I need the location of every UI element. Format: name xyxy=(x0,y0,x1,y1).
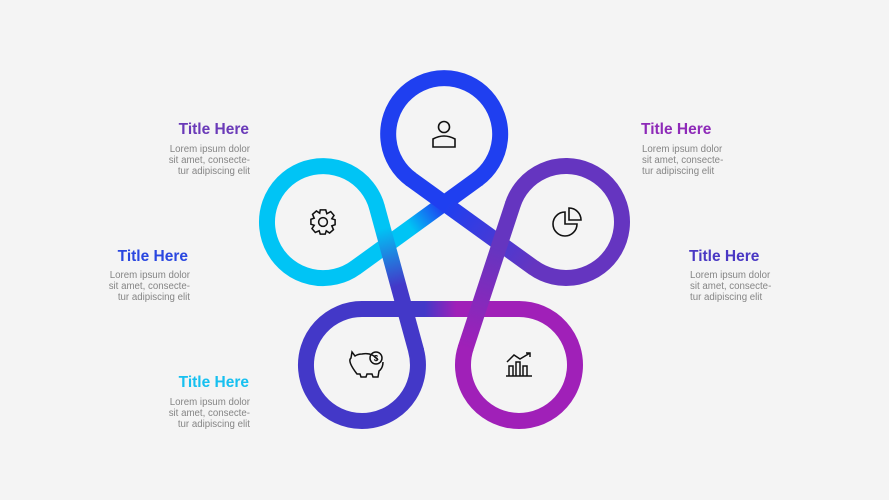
band: right to magenta xyxy=(466,204,513,348)
text block: top-left: sit amet, consecte- xyxy=(169,155,250,166)
text block: bottom-left xyxy=(169,374,251,430)
text block: top-right: sit amet, consecte- xyxy=(642,155,723,166)
text block: top-left xyxy=(169,121,251,177)
icon: gear xyxy=(311,210,335,234)
text block: middle-left xyxy=(109,248,191,303)
text block: bottom-left: Title Here xyxy=(179,374,249,391)
band: indigo to cyan xyxy=(377,206,416,351)
text block: top-right: tur adipiscing elit xyxy=(642,166,714,177)
text block: top-left: Lorem ipsum dolor xyxy=(170,144,251,155)
text block: middle-right: tur adipiscing elit xyxy=(690,292,762,303)
text block: top-left: Title Here xyxy=(179,121,249,138)
loop: right purple xyxy=(513,166,622,278)
loop: bottom-left indigo xyxy=(306,309,418,421)
text block: middle-right: sit amet, consecte- xyxy=(690,281,771,292)
loop: bottom-right magenta xyxy=(463,309,575,421)
loop: top blue xyxy=(388,78,500,179)
text block: middle-left: Lorem ipsum dolor xyxy=(110,270,191,281)
band: top to right xyxy=(410,179,534,268)
text block: top-right: Title Here xyxy=(641,121,712,138)
icon: piggy bank: $ xyxy=(374,354,379,363)
text block: bottom-left: tur adipiscing elit xyxy=(178,419,250,430)
text block: middle-right: Lorem ipsum dolor xyxy=(690,270,771,281)
band: magenta to indigo xyxy=(361,301,520,317)
text block: top-right xyxy=(641,121,723,177)
text block: bottom-left: sit amet, consecte- xyxy=(169,408,250,419)
knot diagram xyxy=(267,78,622,421)
icon: piggy bank xyxy=(350,352,383,377)
text block: middle-left: tur adipiscing elit xyxy=(118,292,190,303)
text block: bottom-left: Lorem ipsum dolor xyxy=(170,397,251,408)
text block: top-left: tur adipiscing elit xyxy=(178,166,250,177)
icon: bar chart growth xyxy=(506,353,532,376)
icon: pie chart xyxy=(553,208,581,236)
text block: middle-left: sit amet, consecte- xyxy=(109,281,190,292)
text block: middle-left: Title Here xyxy=(118,248,188,265)
text block: middle-right xyxy=(689,248,771,303)
band: cyan to top xyxy=(355,179,478,268)
loop: left cyan xyxy=(267,166,377,278)
text block: top-right: Lorem ipsum dolor xyxy=(642,144,723,155)
text block: middle-right: Title Here xyxy=(689,248,760,265)
icon: person xyxy=(433,122,455,147)
